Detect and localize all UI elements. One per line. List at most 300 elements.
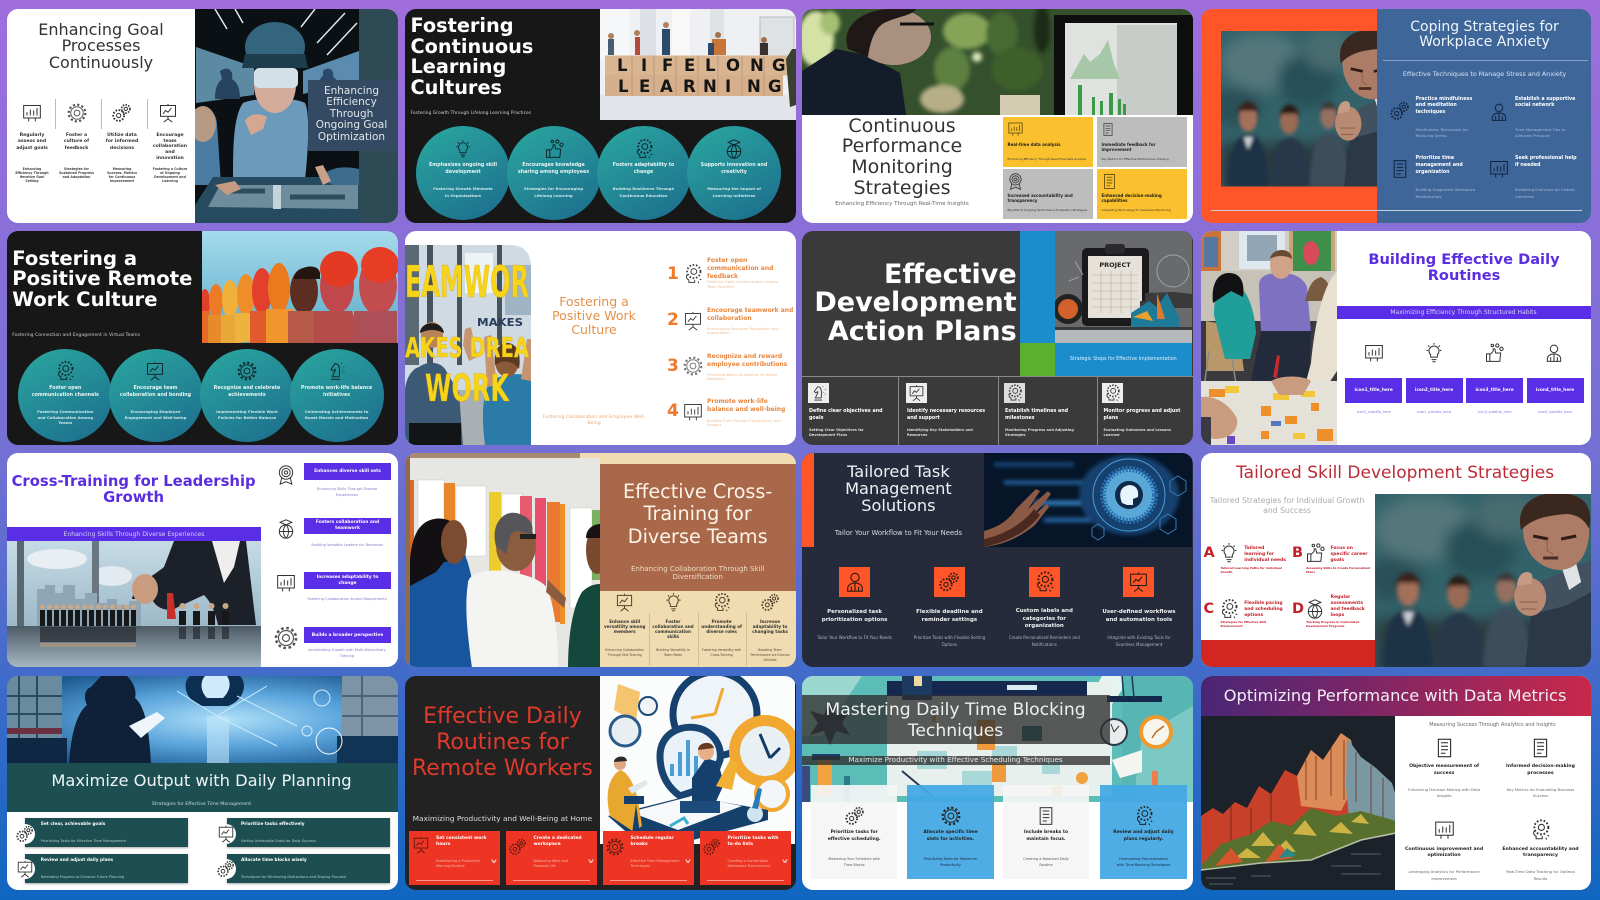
- item 1 text: assess and: [18, 139, 46, 144]
- tile 2: [1406, 378, 1462, 403]
- icon: magnifier: [276, 465, 296, 485]
- item 2 title: Flexible deadline and: [916, 609, 983, 615]
- item C title: options: [1244, 613, 1263, 618]
- icon: bulb: [1424, 343, 1444, 363]
- card 3: Reviewing Progress to Enhance Future Planning: [41, 874, 124, 878]
- item 1 detail: Enhancing Collaboration: [605, 648, 644, 652]
- item 4 box: [304, 627, 391, 643]
- item 4 title: Enhanced accountability and: [1502, 846, 1579, 852]
- subtitle strip: [802, 756, 1110, 764]
- item D title: assessments: [1330, 601, 1363, 606]
- letter A: A: [1204, 545, 1215, 561]
- icon: globe: [726, 139, 742, 159]
- card 4: v: [782, 858, 788, 864]
- title: Fostering a: [12, 247, 137, 270]
- item 2 title: Informed decision-making: [1506, 764, 1575, 769]
- card 1: Prioritize tasks for: [831, 830, 878, 835]
- circle 2 detail: Lifelong Learning: [534, 193, 573, 198]
- item 1 title: Foster open: [707, 257, 747, 264]
- item 3 text: Utilize data: [107, 133, 137, 138]
- card 4: to-do lists: [728, 842, 753, 846]
- item 3 detail: [1416, 187, 1475, 200]
- item 2 title: reminder settings: [922, 617, 977, 623]
- cell 1 detail: Setting Clear Objectives for: [809, 428, 864, 432]
- item 1 detail: [605, 648, 644, 658]
- item 4 detail: Support: [707, 423, 721, 427]
- title: Continuous: [848, 115, 956, 137]
- item C title: [1244, 601, 1283, 619]
- item 4 title: [1102, 608, 1176, 625]
- tile 1: icon1_title_here: [1355, 388, 1393, 393]
- circle 1 text: [32, 385, 99, 399]
- item 1 detail: Insights: [1437, 793, 1452, 798]
- photo: isometric clocks illustration: [600, 676, 795, 844]
- card 2: Prioritize tasks effectively: [241, 822, 305, 827]
- item 2 detail: [1515, 126, 1566, 138]
- icon tile 3: [1004, 383, 1025, 403]
- photo: teamwork poster with raised hands: WORK: [425, 367, 510, 410]
- item 4 box: Builds a broader perspective: [312, 632, 383, 638]
- band: dark teal right strip: [358, 8, 398, 222]
- circle 2 text: Encourages knowledge: [522, 163, 585, 168]
- card 2: [907, 784, 994, 879]
- item 2 title: communication: [655, 629, 691, 634]
- icon: gears badge: [15, 824, 35, 844]
- circle 4 text: creativity: [721, 170, 747, 175]
- title: Mastering Daily Time Blocking: [825, 700, 1086, 720]
- band: orange left block: [1200, 8, 1377, 222]
- item 3 title: Promote: [712, 619, 732, 624]
- item 4 detail: Seamless Management: [1116, 642, 1162, 647]
- item 1 detail: Tailor Your Workflow to Fit Your Needs: [817, 635, 892, 640]
- number 1: 1: [667, 264, 679, 284]
- card: immediate feedback: Key Metrics for Effective Performance Tracking: [1102, 156, 1169, 160]
- item 4 title: [1502, 846, 1579, 859]
- circle 2 detail: Engagement and Well-being: [125, 415, 186, 420]
- item 1 text: [16, 132, 48, 151]
- item 2 detail: Encouraging Employee Recognition and: [707, 327, 779, 331]
- header: gradient band with title: Optimizing Performance with Data Metrics: [1224, 686, 1566, 704]
- card 1: v: [491, 858, 496, 864]
- photo: man with tablet in digital warehouse: [7, 676, 398, 762]
- item 4 detail: Accelerating Growth with Multi-Disciplinary: [308, 648, 386, 652]
- rule: cell 1: [897, 376, 900, 445]
- circle 2: [108, 349, 202, 442]
- circle 1 detail: Teams: [58, 420, 72, 425]
- card 3: breaks: [630, 842, 648, 846]
- circle 1: [416, 126, 510, 220]
- item 4 detail: [1107, 634, 1171, 648]
- item 2 detail: Success: [1533, 793, 1548, 798]
- item 3 title: optimization: [1427, 853, 1461, 858]
- item 2 text: [64, 132, 90, 151]
- cell 2 detail: Resources: [907, 433, 927, 437]
- item 3 title: Recognize and reward: [707, 353, 782, 360]
- photo: 3D data mountain: [1200, 716, 1395, 890]
- item 2 title: [916, 608, 983, 625]
- card 1: hours: [436, 842, 450, 846]
- item 1 detail: Reducing Stress: [1416, 133, 1447, 138]
- card 2: Allocate specific time: [923, 830, 978, 835]
- panel: Tailored Skill Development slide: [1200, 453, 1591, 667]
- item 1 text: adjust goals: [16, 146, 48, 151]
- cell 2 detail: Identifying Key Stakeholders and: [907, 428, 973, 432]
- item 1 detail: [1408, 786, 1480, 800]
- subtitle: Enhancing Collaboration Through Skill: [631, 564, 764, 572]
- subtitle: Fostering Collaboration and Employee Well-: [543, 415, 645, 420]
- subtitle band: Enhancing Skills Through Diverse Experiences: [64, 531, 204, 538]
- cell 3 detail: [1005, 428, 1074, 438]
- card 2: Setting Achievable Goals for Daily Success: [241, 839, 316, 843]
- circle 4 text: [301, 385, 372, 399]
- circle 2 detail: [524, 186, 583, 198]
- item D detail: [1306, 620, 1359, 628]
- item 1 detail: Enhancing: [23, 167, 41, 171]
- tile 2 caption: icon2_subtitle_here: [1417, 410, 1451, 414]
- subtitle: Measuring Success Through Analytics and Insights: [1429, 722, 1556, 728]
- cell 2 title: and support: [907, 416, 940, 420]
- item 2 title: [1506, 764, 1575, 777]
- panel: Fostering Continuous Learning slide: [405, 8, 796, 222]
- item 4 title: transparency: [1523, 853, 1558, 858]
- icon: hand: [1484, 343, 1504, 363]
- circle 1 detail: and Collaboration Among: [37, 415, 93, 420]
- item 4 title: if needed: [1515, 163, 1540, 168]
- number 3: 3: [667, 356, 679, 376]
- item 3 title: diverse roles: [706, 629, 737, 634]
- subtitle: Diversification: [673, 573, 723, 581]
- icon: board: [145, 359, 165, 383]
- photo: project clipboard: [1055, 231, 1192, 343]
- item A detail: Tailored Learning Paths for Individual: [1220, 566, 1282, 570]
- photo: hand touching digital interface: [984, 453, 1192, 547]
- item 2 title: Encourage teamwork and: [707, 307, 793, 314]
- item 2 title: [707, 307, 793, 323]
- card 4: Workspace Environment: [728, 864, 770, 868]
- icon: bulb: [456, 140, 470, 158]
- item 3 detail: [1009, 634, 1080, 648]
- icon: gear: [683, 356, 703, 376]
- item 4 title: and automation tools: [1106, 617, 1172, 623]
- divider 1: [54, 99, 56, 129]
- item 4 title: balance and well-being: [707, 406, 785, 413]
- icon: person: [1544, 343, 1564, 363]
- circle 2 detail: [125, 409, 186, 421]
- item 2 title: Foster: [666, 619, 680, 624]
- icon: brain gear: [712, 593, 731, 612]
- rule: cell 2: [997, 376, 999, 445]
- circle 4 detail: [305, 409, 368, 421]
- card: accountability: transparency: [1008, 198, 1037, 203]
- cell 2 detail: [907, 428, 973, 438]
- tile 4: icon4_title_here: [1536, 388, 1574, 393]
- card 1: [408, 831, 500, 884]
- card 2: Prioritizing Tasks for Maximum: [924, 856, 977, 860]
- item 4 text: team: [163, 139, 177, 144]
- circle 2 text: [120, 385, 191, 399]
- title: [12, 474, 256, 506]
- panel: Positive Remote Work Culture slide: [7, 231, 398, 445]
- item 3 box: [304, 572, 391, 589]
- title: Enhancing Goal: [38, 20, 164, 38]
- item C title: and scheduling: [1244, 607, 1283, 612]
- item A title: individual needs: [1244, 558, 1286, 563]
- item 4 text: and: [165, 150, 175, 155]
- panel: Enhancing Goal Processes slide: [7, 8, 398, 222]
- circle 3 detail: [613, 186, 674, 198]
- card 3: Schedule regular: [630, 836, 674, 840]
- item 3 detail: Measuring: [113, 167, 131, 171]
- circle 3 detail: Implementing Flexible Work: [216, 409, 278, 414]
- title: Positive Remote: [12, 267, 192, 290]
- circle 3 detail: [216, 409, 278, 421]
- number 2: 2: [667, 310, 679, 330]
- icon: notebook and pen: [1530, 736, 1551, 758]
- icon: chess board: [160, 104, 176, 122]
- item 4 title: Increase: [760, 619, 780, 624]
- title: Effective Daily: [423, 704, 582, 728]
- title: Remote Workers: [412, 756, 593, 780]
- tile 1: [1345, 378, 1402, 403]
- item 1 detail: Experiences: [336, 492, 358, 496]
- subtitle band: [7, 527, 261, 541]
- item 2 detail: Sustained Progress: [59, 171, 94, 175]
- panel: Effective Development Action Plans slide: [802, 231, 1192, 445]
- item 4 title: Promote work-life: [707, 398, 768, 405]
- icon tile 1: [839, 567, 870, 597]
- item 3 detail: [707, 373, 777, 382]
- subtitle: [543, 415, 645, 426]
- item 3 title: [701, 619, 742, 634]
- panel: Building Effective Daily Routines slide: [1200, 231, 1591, 445]
- item 4 detail: Development and: [154, 175, 186, 179]
- item 4 detail: Training: [340, 654, 354, 658]
- subtitle strip: Maximize Productivity with Effective Scheduling Techniques: [848, 755, 1063, 764]
- title: Growth: [103, 489, 164, 506]
- item 2 title: processes: [1527, 771, 1554, 776]
- item 1 title: success: [1434, 771, 1454, 776]
- panel: Mastering Daily Time Blocking slide: [802, 676, 1192, 890]
- title: Techniques: [908, 721, 1003, 741]
- item 2 detail: and Adaptation: [63, 175, 90, 179]
- callout: efficiency box: Efficiency: [326, 96, 377, 108]
- title: Development: [814, 287, 1017, 318]
- item A title: Tailored: [1244, 546, 1264, 551]
- circle 2: [506, 126, 600, 220]
- item 4 detail: Integrate with Existing Tools for: [1107, 635, 1171, 640]
- divider 2: [100, 99, 102, 129]
- panel: Cross-Training for Leadership slide: [7, 453, 398, 667]
- title: Routines: [1428, 267, 1500, 284]
- letter C: C: [1204, 601, 1214, 617]
- item 2 detail: Appreciation: [707, 331, 730, 335]
- tile 4 caption: icon4_subtitle_here: [1538, 410, 1572, 414]
- item 4 detail: [1506, 869, 1575, 882]
- item 3 detail: Fostering Versatility with: [702, 648, 741, 652]
- icon tile 3: [1029, 567, 1060, 597]
- card 1: effective scheduling.: [828, 837, 881, 842]
- title: Culture: [571, 322, 617, 337]
- circle 4 detail: Celebrating Achievements to: [305, 409, 368, 414]
- callout: efficiency box: Through: [330, 108, 373, 120]
- item 1 detail: Enhancing Decision-Making with Data: [1408, 786, 1480, 792]
- circle 1 detail: [37, 409, 93, 426]
- photo: team workshop at table: [1200, 231, 1336, 445]
- item 2 detail: Time Management Tips to: [1515, 126, 1566, 132]
- cell 4 title: Monitor progress and adjust: [1104, 408, 1180, 414]
- photo: profiles in red and orange: [202, 231, 398, 343]
- card 1: Establishing a Productive: [436, 858, 480, 862]
- icon: chart screen: [1434, 819, 1454, 841]
- band: blue subtitle: Strategic Steps for Effective Implementation: [1070, 357, 1177, 362]
- card 2: [226, 818, 390, 847]
- item 1 detail: Through Skill Sharing: [608, 652, 642, 656]
- item 4 detail: Building Trust Through Transparency and: [707, 419, 780, 423]
- icon: person: [1492, 104, 1506, 121]
- item 3 title: organization: [1416, 170, 1450, 175]
- item 2 title: social network: [1515, 103, 1554, 108]
- band: tan top edge: [405, 453, 580, 458]
- item B title: goals: [1330, 558, 1344, 563]
- item A detail: [1220, 566, 1282, 574]
- circle 4 text: [701, 162, 767, 175]
- item 3 detail: Leveraging Analytics for Performance: [1408, 869, 1480, 874]
- item 2 detail: [59, 167, 94, 179]
- item 3 detail: Success: Metrics: [107, 171, 137, 175]
- photo: lifelong learning blocks: LEARNING: [618, 76, 782, 96]
- photo: flat calendar illustration: [802, 676, 1192, 802]
- circle 1 text: communication channels: [32, 393, 99, 398]
- cell 1 title: goals: [809, 416, 823, 420]
- item 3 title: [1405, 846, 1483, 859]
- item 4 title: adaptability to: [753, 624, 787, 629]
- divider 1: [648, 613, 651, 666]
- circle 3: [200, 349, 294, 442]
- circle 1 text: Emphasizes ongoing skill: [429, 163, 497, 168]
- item 3 title: management and: [1416, 163, 1463, 168]
- photo: executive choosing figure: [7, 541, 261, 667]
- circle 3 text: change: [634, 170, 653, 175]
- card 3: [24, 854, 188, 883]
- title: [552, 295, 636, 337]
- cell 2 title: [907, 408, 985, 422]
- item 3 text: decisions: [110, 146, 134, 151]
- item 4 text: Encourage: [156, 133, 184, 138]
- photo: man pointing: [1221, 31, 1377, 186]
- photo: man looking at monitor: [802, 9, 1193, 115]
- card 3: Routine: [1039, 863, 1053, 867]
- band: teal title block: [7, 762, 398, 812]
- icon: board: [615, 593, 634, 612]
- photo: teamwork poster with raised hands: EAMWOR: [405, 258, 529, 308]
- callout: efficiency box: Enhancing: [324, 85, 379, 97]
- icon: chart board: [23, 105, 41, 122]
- card 1: Time Blocks: [844, 863, 865, 867]
- subtitle: Enhancing Efficiency Through Real-Time Insights: [835, 200, 969, 206]
- cell 4 detail: [1104, 428, 1171, 438]
- tile 3 caption: icon3_subtitle_here: [1478, 410, 1511, 414]
- item 1 title: techniques: [1416, 110, 1445, 115]
- icon: bulb: [664, 593, 682, 612]
- item 3 title: understanding of: [701, 624, 742, 629]
- item 2 text: feedback: [65, 146, 88, 151]
- card 1: Prioritizing Tasks for Effective Time Management: [41, 839, 126, 843]
- photo: colleagues at planning wall: [410, 458, 600, 667]
- item C detail: [1220, 620, 1266, 628]
- photo: project clipboard: PROJECT: [1100, 261, 1132, 269]
- item 1 detail: Efficiency Through: [15, 171, 49, 175]
- item 3 detail: Relationships: [1416, 194, 1441, 199]
- letter D: D: [1292, 601, 1304, 617]
- icon tile 4: [1123, 567, 1154, 597]
- cell 4 title: [1104, 408, 1180, 422]
- item 1 detail: Fostering Open Communication Among: [707, 280, 778, 284]
- item 3 detail: for Continuous: [109, 175, 135, 179]
- item A title: learning for: [1244, 552, 1274, 557]
- card: real-time data: Enhancing Efficiency Through Real-Time Data Analysis: [1008, 156, 1086, 160]
- title: Diverse Teams: [628, 525, 768, 548]
- title: Cross-Training for Leadership: [12, 473, 256, 490]
- item 3 detail: [107, 167, 137, 183]
- card: immediate feedback: Immediate feedback for: [1102, 142, 1155, 146]
- title: [623, 481, 772, 549]
- title: Strategies: [853, 177, 951, 199]
- card 4: Prioritize tasks with: [728, 836, 779, 840]
- panel: Effective Daily Routines slide: [405, 676, 796, 890]
- title: [842, 115, 962, 199]
- circle 1 detail: [433, 186, 493, 198]
- icon: gear: [274, 626, 298, 650]
- circle 2 detail: Encouraging Employee: [130, 409, 181, 414]
- title: Cultures: [410, 76, 502, 98]
- item 4 detail: Boosting Team: [758, 648, 782, 652]
- item D title: Regular: [1330, 595, 1350, 600]
- item 4 detail: Learning: [162, 179, 178, 183]
- item 4 detail: Calmness: [1515, 194, 1534, 199]
- title: Building Effective Daily: [1368, 251, 1560, 268]
- item B detail: Assessing Skills to Create Personalized: [1306, 566, 1370, 570]
- card 4: with Time Blocking Techniques: [1117, 863, 1170, 867]
- item 2 detail: Options: [942, 642, 957, 647]
- card: real-time data: [1003, 116, 1093, 166]
- photo: lifelong learning blocks: [600, 9, 796, 120]
- photo: teamwork poster with raised hands: [405, 245, 531, 445]
- circle 3: [596, 126, 690, 220]
- card 4: Allocate time blocks wisely: [241, 858, 307, 862]
- icon: chart badge: [216, 824, 236, 844]
- item 2 detail: Key Metrics for Evaluating Business: [1507, 786, 1574, 792]
- item 4 text: [153, 132, 187, 161]
- item 3 detail: [1408, 869, 1480, 882]
- item D title: and feedback: [1330, 607, 1365, 612]
- item 4 detail: [707, 419, 780, 428]
- item A detail: Growth: [1220, 570, 1232, 574]
- card 1: [24, 818, 188, 847]
- item 3 title: organization: [1025, 623, 1064, 629]
- item D title: loops: [1330, 613, 1344, 618]
- title: [1368, 252, 1560, 283]
- item 1 text: Regularly: [20, 133, 44, 138]
- circle 2 text: [518, 162, 589, 175]
- panel: Maximize Output slide: [7, 676, 398, 890]
- item 3 title: [707, 353, 787, 369]
- card 1: Morning Routine: [436, 864, 465, 868]
- title: Fostering: [410, 14, 514, 37]
- item 4 detail: Real-Time Data Tracking for Optimal: [1506, 869, 1575, 874]
- circle 4 detail: Learning Initiatives: [713, 193, 755, 198]
- item 3 title: employee contributions: [707, 361, 787, 368]
- icon tile 4: [1102, 383, 1123, 403]
